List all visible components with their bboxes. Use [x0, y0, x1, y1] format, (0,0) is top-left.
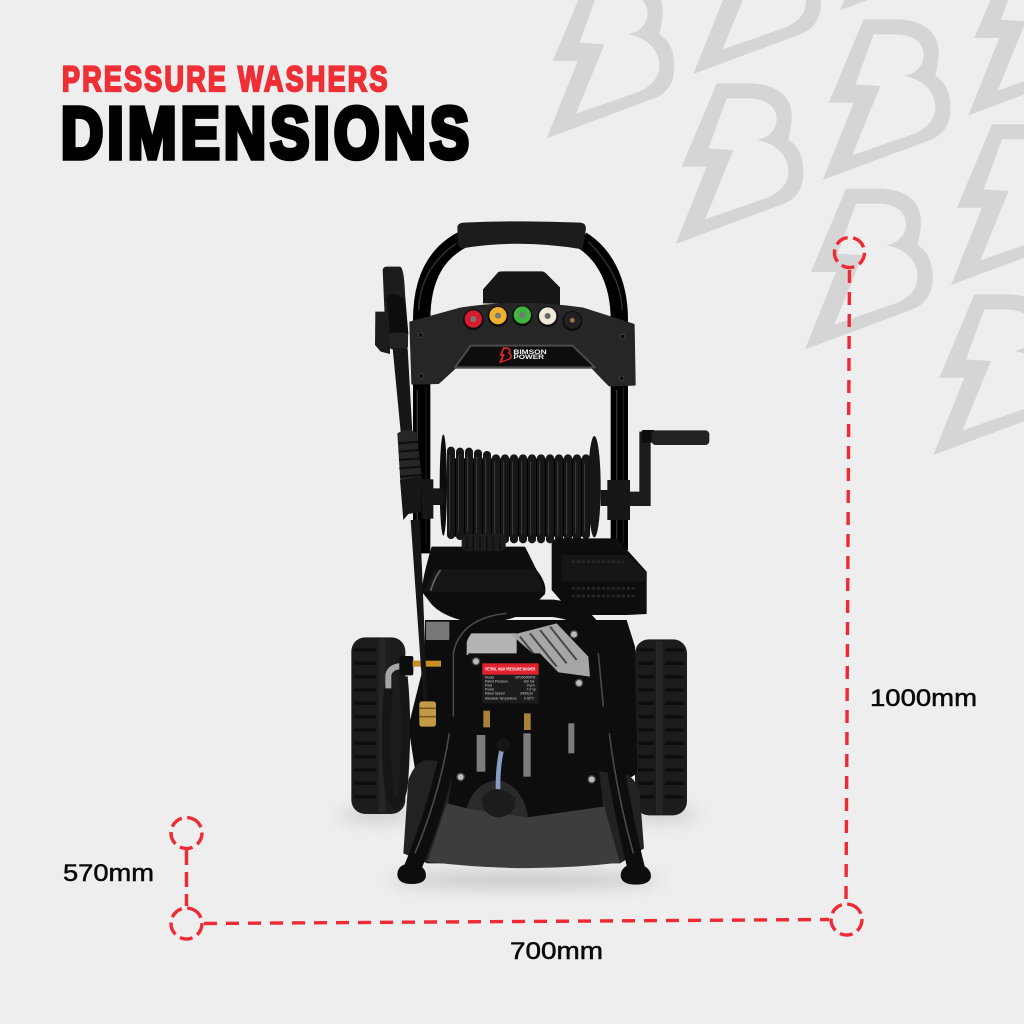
specification label: 3400rpm — [520, 692, 533, 696]
dimension line: depth 570mm — [167, 813, 206, 943]
spray gun and lance — [383, 267, 422, 520]
front plate — [448, 631, 603, 817]
label: 1000mm: 1000mm — [870, 685, 977, 712]
brand logo: BIMSON — [513, 350, 547, 356]
lower assembly — [351, 520, 687, 885]
foam handle grip — [457, 221, 586, 249]
dimension line: width 700mm — [204, 900, 866, 939]
air filter cover — [552, 538, 647, 615]
vertical dashed line — [846, 270, 850, 902]
lower marker — [167, 904, 206, 943]
vertical dashed line — [185, 850, 188, 906]
hose reel — [440, 434, 601, 539]
title — [61, 60, 473, 174]
specification label: Rated Pressure — [485, 680, 508, 684]
reel axle and brackets — [422, 479, 630, 520]
background pattern: lightning B logos — [547, 0, 1024, 455]
ground shadow — [340, 809, 698, 888]
plate bolts — [457, 631, 595, 783]
plate slots — [477, 711, 574, 777]
specification label: 9 lpm — [527, 683, 535, 687]
engine block with fins — [408, 620, 637, 780]
control panel — [411, 304, 634, 385]
side hose and fittings — [386, 520, 441, 803]
heading: dimensions: DIMENSIONS — [61, 93, 473, 174]
specification label: PETROL HIGH PRESSURE WASHER — [485, 667, 536, 672]
top plate — [483, 271, 560, 305]
top marker — [830, 233, 869, 272]
specification label: Flow — [485, 683, 493, 687]
logo badge — [455, 346, 595, 367]
horizontal dashed line — [204, 920, 829, 924]
label: 570mm: 570mm — [63, 860, 154, 887]
wheels — [351, 637, 687, 815]
specification label: Power — [485, 687, 495, 691]
specification label — [482, 663, 539, 703]
specification label: 0-50°C — [524, 697, 535, 701]
specification label: BP3600BPW — [515, 676, 536, 680]
specification label: Rated Speed — [485, 692, 505, 696]
dimension line: height 1000mm — [830, 233, 869, 902]
upper marker — [167, 813, 206, 853]
intake tube and filter bowl — [467, 738, 528, 818]
base tank flanks — [403, 760, 644, 863]
pressure washer product illustration — [340, 221, 709, 888]
frame uprights and arch — [417, 240, 623, 553]
crank handle — [630, 430, 709, 506]
panel screws — [418, 333, 625, 381]
rubber feet — [397, 864, 651, 885]
upper assembly — [375, 221, 709, 553]
black tubular front frame — [412, 608, 637, 870]
specification label: Model — [485, 676, 494, 680]
base tank centre — [427, 803, 620, 868]
nozzles — [463, 305, 582, 331]
specification label: 7.0 hp — [527, 687, 536, 691]
right marker — [827, 900, 866, 939]
fuel tank and cap — [422, 534, 545, 624]
specification label: Allowable Temperature — [485, 697, 517, 701]
heading: pressure washers: PRESSURE WASHERS — [62, 60, 390, 99]
label: 700mm: 700mm — [510, 938, 603, 965]
specification label: 180 bar — [523, 680, 536, 684]
hook at left — [375, 312, 390, 354]
brand logo — [499, 347, 547, 363]
brand logo: POWER — [513, 355, 545, 361]
